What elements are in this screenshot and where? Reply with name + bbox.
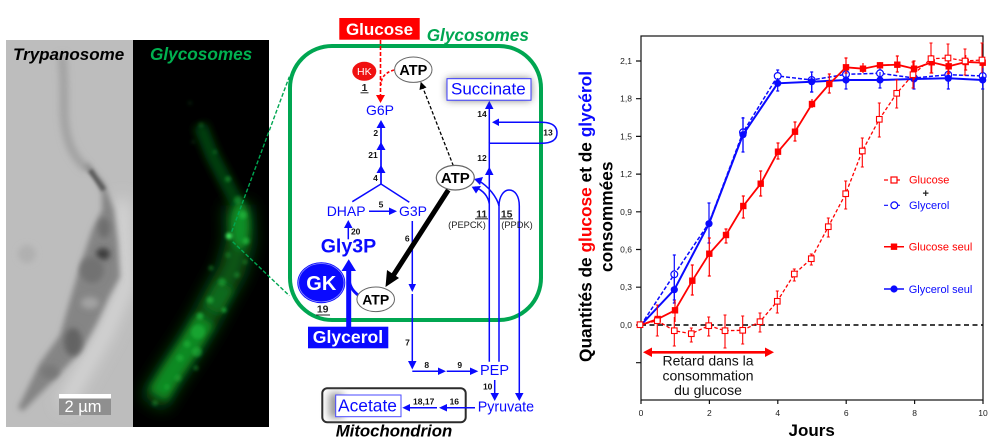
y tick labels: 1,5 xyxy=(620,131,632,141)
callout: delay text: consommation xyxy=(662,368,754,384)
panel: glycosome metabolic pathway xyxy=(290,18,557,440)
x tick labels: 0 xyxy=(639,408,644,418)
legend: glucose alone: Glucose seul xyxy=(909,242,972,254)
y tick labels: 0,6 xyxy=(620,244,632,254)
step numbers xyxy=(351,109,553,392)
icon: flagellum xyxy=(62,55,86,168)
metabolite labels: G3P xyxy=(399,203,427,219)
thick ATP arrow xyxy=(386,190,448,287)
x tick labels: 8 xyxy=(912,408,917,418)
box: Acetate: Acetate xyxy=(338,396,397,416)
y axis title: Quantités de glucose et de glycérol xyxy=(576,71,596,362)
y tick labels: 0,0 xyxy=(620,320,632,330)
enzyme: HK: HK xyxy=(357,66,372,78)
glucose entry arrow xyxy=(376,40,394,103)
scale bar xyxy=(59,394,111,416)
step numbers: 8 xyxy=(424,360,429,370)
arrowheads xyxy=(344,101,524,401)
zoom lines xyxy=(232,77,289,296)
step numbers: 2 xyxy=(373,128,378,138)
enzyme: GK: GK xyxy=(306,273,337,295)
step numbers: 14 xyxy=(477,109,487,119)
box: Glucose: Glucose xyxy=(346,20,413,39)
y tick labels: 2,1 xyxy=(620,56,632,66)
enzyme labels PEPCK PPDK: 15 xyxy=(501,208,513,220)
ATP lower: ATP xyxy=(362,292,389,308)
metabolite labels: DHAP xyxy=(327,203,366,219)
callout: delay text: du glucose xyxy=(674,382,742,398)
numbers over mitochondrion: 18,17 xyxy=(413,397,435,407)
y axis title xyxy=(576,71,617,362)
legend: glucose plus glycerol xyxy=(884,174,949,212)
numbers over mitochondrion xyxy=(413,397,459,407)
series: glucose alone xyxy=(641,55,986,325)
plot frame and axes xyxy=(636,36,983,404)
box: Glycerol: Glycerol xyxy=(313,327,383,347)
pathway lines xyxy=(348,105,557,396)
panel: mitochondrion xyxy=(322,388,466,422)
enzyme: GK xyxy=(297,262,345,315)
callout: delay text: Retard dans la xyxy=(662,352,754,368)
step numbers: 21 xyxy=(368,150,378,160)
panel: trypanosome micrograph xyxy=(6,40,133,427)
icon: trypanosome cell xyxy=(18,163,120,411)
enzyme: HK xyxy=(352,62,376,94)
step numbers: 4 xyxy=(373,173,378,183)
step numbers: 20 xyxy=(351,226,361,236)
enzyme: HK: 1 xyxy=(362,82,368,94)
y axis title: consommées xyxy=(597,162,617,272)
enzyme labels PEPCK PPDK: (PPDK) xyxy=(501,220,533,230)
arrow: glycerol to Gly3P xyxy=(342,259,358,328)
enzyme: GK: 19 xyxy=(317,303,329,315)
x tick labels: 2 xyxy=(707,408,712,418)
icon: glycosome particles xyxy=(152,100,250,406)
scale bar: 2 µm xyxy=(64,398,102,416)
legend: glucose plus glycerol: Glycerol xyxy=(909,200,949,212)
heading: Glycosomes micrograph: Glycosomes xyxy=(150,44,252,64)
ATP middle: ATP xyxy=(441,170,470,187)
y tick labels: 1,8 xyxy=(620,94,632,104)
metabolite labels: G6P xyxy=(366,102,394,118)
step numbers: 10 xyxy=(483,382,493,392)
ATP lower xyxy=(357,287,395,312)
numbers over mitochondrion: 16 xyxy=(450,397,459,407)
ATP top xyxy=(395,57,432,82)
box: Succinate: Succinate xyxy=(451,80,526,98)
chart: consumption over days xyxy=(620,36,988,440)
step numbers: 7 xyxy=(405,338,410,348)
enzyme labels PEPCK PPDK: (PEPCK) xyxy=(448,220,486,230)
y tick labels xyxy=(620,56,632,330)
callout: delay text xyxy=(662,352,754,398)
x tick labels: 10 xyxy=(978,408,988,418)
enzyme labels PEPCK PPDK xyxy=(448,208,533,230)
ATP middle xyxy=(436,165,474,190)
legend: glucose plus glycerol: + xyxy=(922,188,929,200)
x tick labels: 6 xyxy=(844,408,849,418)
heading: Glycosomes: Glycosomes xyxy=(427,25,529,45)
step numbers: 12 xyxy=(477,153,487,163)
legend: glucose plus glycerol: Glucose xyxy=(909,174,949,186)
ATP top: ATP xyxy=(399,63,428,79)
metabolite labels xyxy=(321,102,534,416)
glycosome membrane xyxy=(290,46,541,320)
dashed ATP arrow xyxy=(420,82,453,166)
step numbers: 9 xyxy=(457,360,462,370)
x tick labels xyxy=(639,408,988,418)
step numbers: 5 xyxy=(379,200,384,210)
metabolite labels: Pyruvate xyxy=(478,400,534,416)
y tick labels: 1,2 xyxy=(620,169,632,179)
series: glycerol alone xyxy=(641,69,986,325)
x tick labels: 4 xyxy=(775,408,780,418)
metabolite labels: PEP xyxy=(480,363,509,379)
series: glycerol with glucose xyxy=(641,66,986,325)
zero line xyxy=(641,324,983,326)
y tick labels: 0,9 xyxy=(620,207,632,217)
arrow: glucose delay xyxy=(643,348,774,357)
legend: glycerol alone: Glycerol seul xyxy=(909,284,972,296)
panel: glycosomes fluorescence xyxy=(133,40,269,427)
x axis title: Jours xyxy=(789,421,835,440)
metabolite labels: Gly3P xyxy=(321,236,376,258)
enzyme labels PEPCK PPDK: 11 xyxy=(476,208,487,220)
step numbers: 13 xyxy=(543,128,553,138)
step numbers: 6 xyxy=(405,233,410,243)
heading: Trypanosome: Trypanosome xyxy=(13,45,124,64)
arrows: pyruvate to acetate xyxy=(402,404,475,412)
y tick labels: 0,3 xyxy=(620,282,632,292)
series: glucose with glycerol xyxy=(637,43,985,348)
label: Mitochondrion: Mitochondrion xyxy=(336,422,452,440)
